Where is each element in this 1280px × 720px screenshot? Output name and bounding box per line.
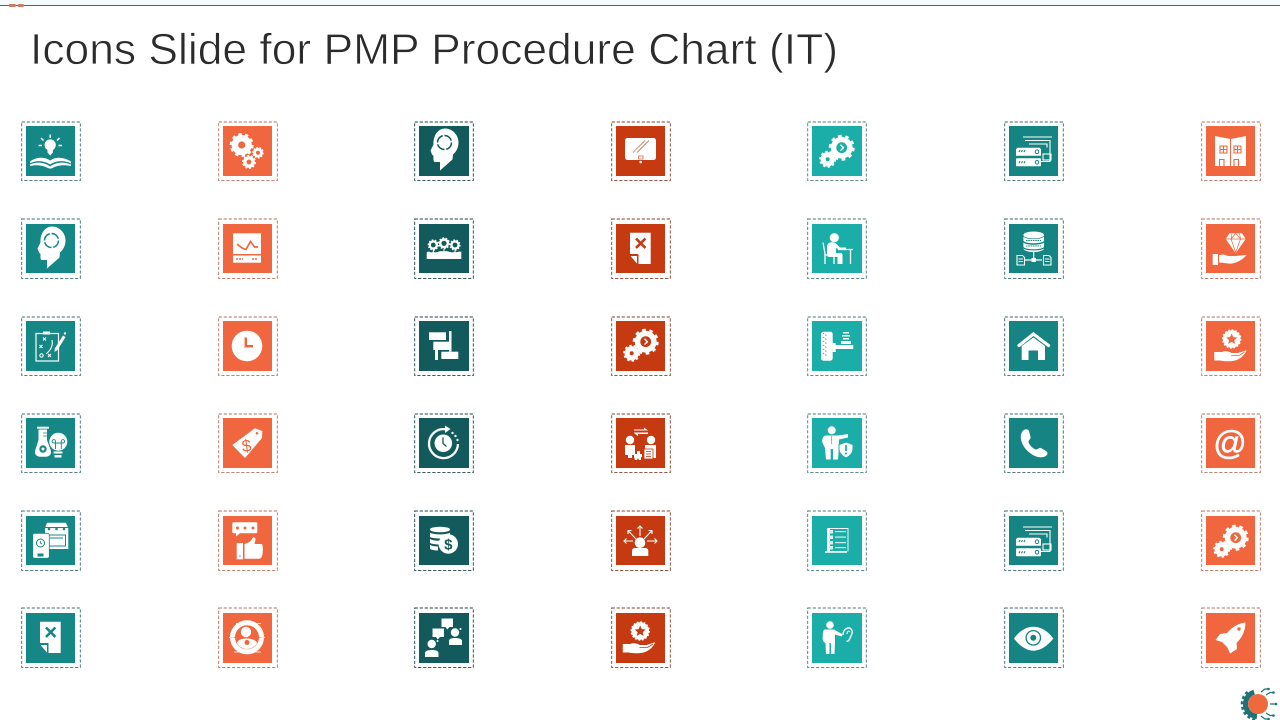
icon: ring with person bbox=[219, 608, 277, 667]
icon: gears on ground bbox=[415, 219, 473, 278]
icon: strategy clipboard with pencil bbox=[22, 317, 80, 376]
icon: gears with arrow bbox=[1202, 511, 1260, 570]
icon: eye bbox=[1005, 608, 1063, 667]
top rule bbox=[0, 0, 1280, 7]
icon: clock with circular arrow bbox=[415, 414, 473, 473]
icon: checklist bbox=[808, 511, 866, 570]
icon: chat and thumbs up bbox=[219, 511, 277, 570]
icon: home bbox=[1005, 317, 1063, 376]
icon: hand with star badge bbox=[1202, 317, 1260, 376]
icon: document with cross bbox=[612, 219, 670, 278]
icon: price tag: $ bbox=[240, 436, 253, 456]
icon: telephone bbox=[1005, 414, 1063, 473]
icon: phone and oven bbox=[22, 511, 80, 570]
icon: people exchanging bbox=[612, 414, 670, 473]
icon: clock bbox=[219, 317, 277, 376]
icon: monitor bbox=[612, 122, 670, 181]
icon: officer with shield bbox=[808, 414, 866, 473]
icon: three gears bbox=[219, 122, 277, 181]
icon: person at desk bbox=[808, 219, 866, 278]
icon: rocket bbox=[1202, 608, 1260, 667]
icon: hand with star badge bbox=[612, 608, 670, 667]
icon: buildings bbox=[1202, 122, 1260, 181]
icon: coins and dollar: $ bbox=[444, 536, 453, 554]
icon: coins and dollar bbox=[415, 511, 473, 570]
icon: tire alignment bbox=[808, 317, 866, 376]
icon: flask and bulb bbox=[22, 414, 80, 473]
icon: server windows bbox=[1005, 122, 1063, 181]
icon: database network bbox=[1005, 219, 1063, 278]
icon: hand with diamond bbox=[1202, 219, 1260, 278]
icon: signpost bbox=[415, 317, 473, 376]
icon: at sign bbox=[1202, 414, 1260, 473]
logo: gear with circuit lines bbox=[1239, 685, 1277, 720]
icon: gears with arrow bbox=[612, 317, 670, 376]
icon: book with light bulb bbox=[22, 122, 80, 181]
title: Icons Slide for PMP Procedure Chart (IT) bbox=[30, 26, 838, 74]
icon: server windows bbox=[1005, 511, 1063, 570]
icon: head with target bbox=[415, 122, 473, 181]
icon: head with target bbox=[22, 219, 80, 278]
icon: person with ear bbox=[808, 608, 866, 667]
icon: document with cross bbox=[22, 608, 80, 667]
icon: chart monitor bbox=[219, 219, 277, 278]
icon: price tag bbox=[219, 414, 277, 473]
icon: at sign: @ bbox=[1213, 424, 1247, 461]
icon: person with radiating arrows bbox=[612, 511, 670, 570]
icon: people with chat bubbles bbox=[415, 608, 473, 667]
icon: gears with arrow bbox=[808, 122, 866, 181]
